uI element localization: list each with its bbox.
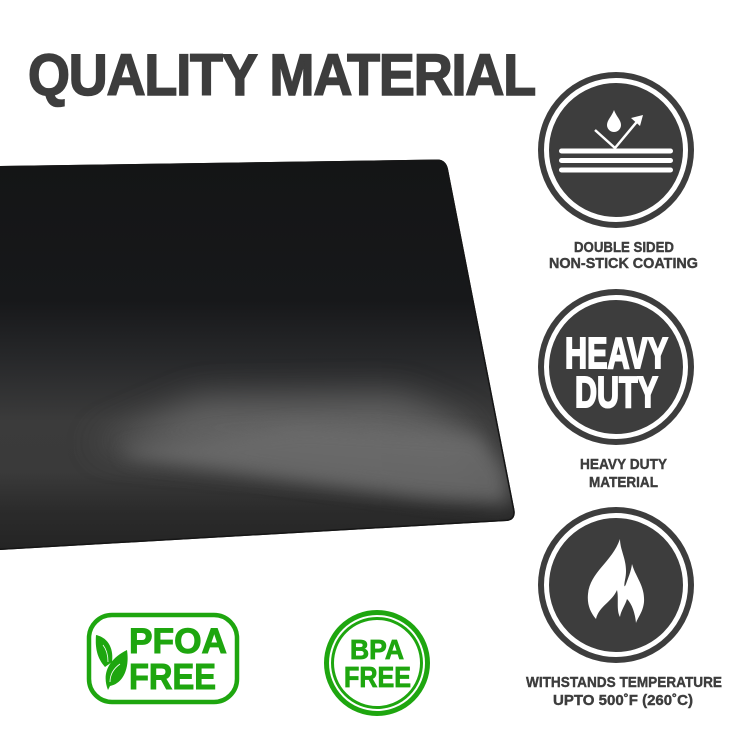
icon: leaves bbox=[96, 635, 128, 690]
icon: double sided non-stick coating bbox=[538, 72, 694, 228]
product photo: black non-stick mat bbox=[0, 150, 530, 560]
badge: PFOA free: FREE bbox=[129, 656, 216, 697]
label: heavy duty material: MATERIAL bbox=[589, 475, 658, 491]
label: withstands temperature: WITHSTANDS TEMPERATURE bbox=[526, 675, 722, 691]
badge: BPA free: BPA bbox=[350, 634, 404, 665]
badge: PFOA free: PFOA bbox=[129, 622, 227, 661]
badge: BPA free bbox=[326, 612, 428, 714]
label: double sided non-stick coating: DOUBLE SIDED bbox=[574, 240, 674, 256]
badge: BPA free: FREE bbox=[344, 662, 411, 694]
icon: heavy duty badge: DUTY bbox=[575, 368, 658, 417]
badge: PFOA free bbox=[89, 615, 237, 702]
icon: flame temperature bbox=[538, 507, 694, 663]
label: double sided non-stick coating: NON-STICK COATING bbox=[549, 256, 698, 272]
label: withstands temperature bbox=[526, 675, 722, 709]
icon: heavy duty badge bbox=[538, 289, 694, 445]
title: QUALITY MATERIAL bbox=[28, 43, 535, 108]
label: heavy duty material: HEAVY DUTY bbox=[580, 457, 667, 473]
label: withstands temperature: UPTO 500˚F (260˚C) bbox=[553, 693, 693, 709]
icon: heavy duty badge: HEAVY bbox=[565, 329, 668, 378]
label: heavy duty material bbox=[580, 457, 667, 491]
label: double sided non-stick coating bbox=[549, 240, 698, 272]
